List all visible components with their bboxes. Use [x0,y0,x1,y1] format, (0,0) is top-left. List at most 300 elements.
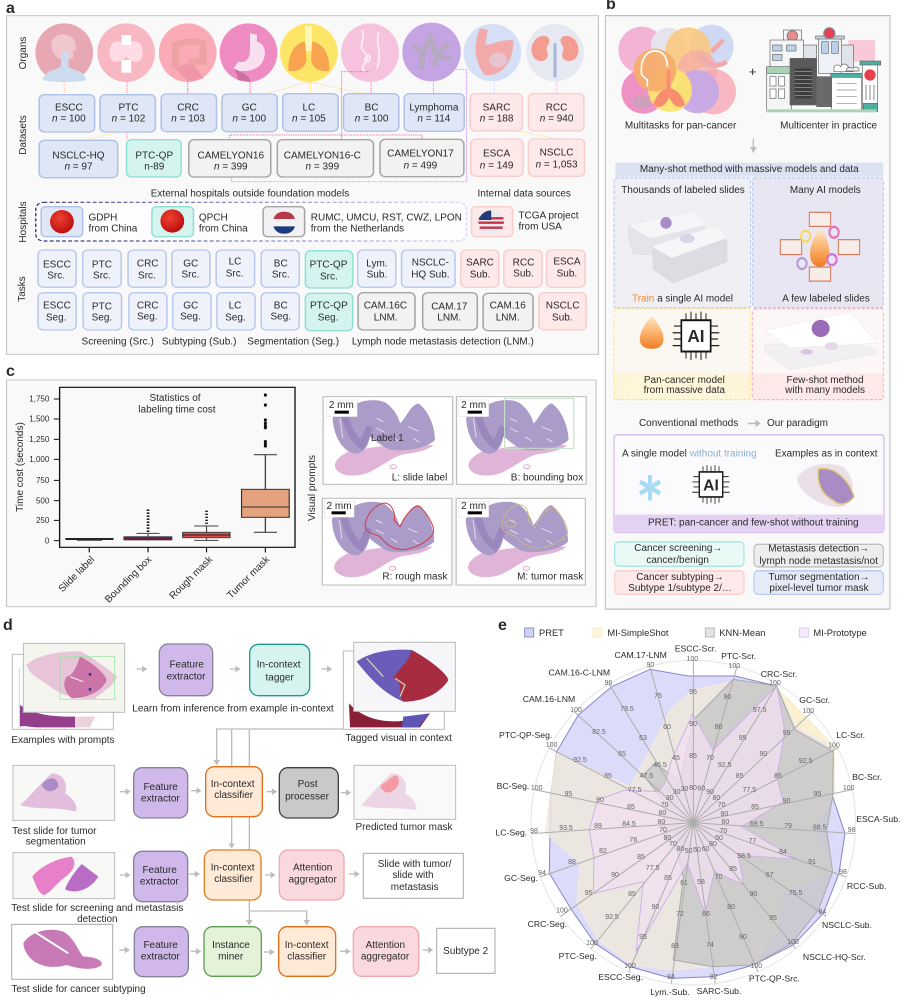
axis tick values: 92.5 [718,762,732,769]
axis tick values: 45 [672,755,680,762]
axis tick values: 90 [646,662,654,669]
task text: LNM. [437,312,461,323]
axis tick values: 82 [599,848,607,855]
axis tick values: 85 [664,875,672,882]
axis tick values: 60 [697,785,705,792]
task text: LNM. [374,312,398,323]
classifier row 2: classifier [214,790,254,801]
classifier row 2 [206,767,262,817]
dataset text: n = 188 [480,113,514,124]
task text: Src. [272,269,290,280]
axis tick values: 79 [784,823,792,830]
predicted mask: Predicted tumor mask [355,822,453,833]
axis tick values: 30 [680,786,688,793]
task text: Src. [320,271,338,282]
arrow [265,873,274,877]
dataset text: n = 97 [64,161,93,172]
axis tick values: 47.5 [640,773,653,780]
axis tick values: 89 [594,823,602,830]
attention aggregator row 3: Attention [293,862,332,873]
sub-panel: few-shot method [753,309,883,400]
instance miner: miner [218,951,244,962]
axis tick values: 58.5 [737,853,751,860]
task legend text: lymph node metastasis/not [759,556,878,567]
axis tick values: 80 [657,819,665,826]
task text: Sub. [367,269,387,280]
classifier row 4: classifier [287,951,327,962]
axis names: BC-Seg. [497,781,529,791]
task legend boxes [615,542,883,594]
axis tick values: 98 [839,869,847,876]
dataset text: n = 105 [292,113,326,124]
box plot chart: 0 [45,536,50,545]
axis tick values: 85 [627,804,635,811]
axis tick values: 82.5 [592,729,606,736]
feature extractor [159,644,213,696]
row labels for panel a: Organs [18,37,29,69]
classifier row 4 [279,927,336,976]
dataset text: n = 940 [540,113,574,124]
task legend text: cancer/benign [646,555,709,566]
axis tick values: 80 [720,811,728,818]
task text: CAM.16C [364,300,407,311]
dataset text: PTC [118,102,138,113]
task legend text: Cancer subtyping→ [636,572,724,583]
dataset text: BC [365,102,378,113]
task text: LC [229,300,241,311]
feature extractor: Feature [169,659,204,670]
box plot chart: 750 [36,476,50,485]
axis names: GC-Seg. [504,873,538,883]
axis tick values: 83 [671,943,679,950]
header bar many-shot: Many-shot method with massive models and data [640,164,859,175]
axis tick values: 90 [689,721,697,728]
instance miner [204,927,261,976]
attention aggregator row 4: aggregator [361,951,410,962]
task boxes [38,250,455,330]
axis tick values: 97.5 [753,707,767,714]
dataset text: n = 100 [52,113,86,124]
legend: KNN-Mean [719,628,765,638]
row labels for panel a: Hospitals [18,201,29,243]
axis tick values: 50 [715,835,723,842]
axis tick values: 100 [687,656,698,663]
feature extractor row 3: extractor [140,876,179,887]
task text: Src. [181,269,199,280]
axis names: LC-Seg. [495,827,527,837]
task legend text [628,543,878,594]
slide: bounding box: B: bounding box [511,473,583,484]
task text: CRC [137,300,159,311]
axis names: ESCA-Sub. [856,814,900,824]
box plot chart [29,387,295,552]
axis tick values: 60 [702,846,710,853]
radar spokes [531,660,855,983]
feature extractor row 2 [134,768,188,818]
axis tick values: 100 [803,708,814,715]
axis tick values: 100 [556,907,568,914]
sub-panel: thousands of labeled slides [614,178,751,308]
axis tick values: 94 [538,870,546,877]
axis names: PTC-Seg. [559,951,597,961]
box plot chart: Statistics of [149,393,201,404]
axis tick values: 91 [808,859,816,866]
example slides with prompts [11,643,125,746]
axis tick values: 90 [706,789,714,796]
axis tick values: 84 [779,849,787,856]
row labels for panel a: Datasets [18,115,29,155]
axis tick values: 75 [654,693,662,700]
arrow [267,790,276,794]
feature extractor row 4 [134,927,188,977]
panel: e radar chart [495,628,900,997]
task text: Src. [226,268,244,279]
task text: ESCC [43,259,71,270]
hospitals row: from China [199,223,248,234]
axis tick values: 95 [739,735,747,742]
axis names: Lym.-Sub. [650,987,690,997]
result box row 3: metastasis [391,882,439,893]
task text: Sub. [470,269,490,280]
axis tick values: 95 [783,730,791,737]
sub-panel: pan-cancer model: Pan-cancer model [644,375,725,386]
axis names: CAM.16-LNM [523,694,575,704]
PRET panel [614,435,884,533]
arrow [341,791,350,795]
axis tick values: 67 [766,872,774,879]
result box row 3 [363,853,463,898]
task abbreviations caption: Lymph node metastasis detection (LNM.) [352,336,534,347]
sub-panel: many AI models [753,178,883,308]
arrow [340,949,349,953]
axis tick values: 77.5 [628,787,642,794]
slide: slide label: 2 mm [329,400,354,411]
panel label d: d [3,617,13,634]
post processer: processer [285,791,330,802]
row: tumor segmentation slide: segmentation [26,836,86,847]
axis tick values: 94 [667,974,675,981]
task text: Seg. [180,311,201,322]
axis tick values: 96 [604,680,612,687]
dataset text: CAMELYON16-C [284,150,361,161]
task text: BC [274,300,288,311]
feature extractor row 4: Feature [143,940,178,951]
slide: rough mask: R: rough mask [382,572,448,583]
axis names: PTC-Scr. [721,651,756,661]
dataset boxes row 1 [39,94,464,178]
sub-panel: few-shot method: Few-shot method [786,375,864,386]
slide: rough mask: 2 mm [327,501,352,512]
instance miner: Instance [212,940,250,951]
dataset text: Lymphoma [409,102,459,113]
panel label c: c [6,363,15,380]
axis names: NSCLC-Sub. [822,920,872,930]
legend: MI-SimpleShot [607,628,669,638]
axis tick values: 100 [624,963,636,970]
axis tick values: 95 [813,791,821,798]
sub-panel: many AI models: A few labeled slides [782,293,870,304]
arrow [137,667,146,671]
axis tick values: 70 [706,755,714,762]
dataset text: ESCA [483,148,511,159]
arrow [120,790,129,794]
task text: CRC [137,258,159,269]
hospitals row: TCGA project [518,210,579,221]
axis tick values: 70 [718,802,726,809]
axis tick values: 92.5 [573,757,587,764]
box plot chart: 250 [36,516,50,525]
attention aggregator row 3 [279,850,344,900]
task text: HQ Sub. [411,269,450,280]
task text: PTC-QP [310,259,348,270]
axis names: CAM.17-LNM [614,650,667,660]
chart axis labels for panel c: Visual prompts [307,455,318,521]
panel: d workflow [11,642,495,995]
axis tick values: 85 [774,773,782,780]
sub-panel: pan-cancer model: AI [687,326,705,346]
arrow [423,948,432,952]
chart axis labels for panel c: Tumor mask [225,554,273,601]
feature extractor row 3 [134,851,188,902]
axis tick values: 100 [570,707,582,714]
example slides with prompts: Examples with prompts [11,735,115,746]
task text: BC [274,258,288,269]
task text: LNM. [496,312,520,323]
axis tick values: 85 [637,854,645,861]
axis tick values: 70 [669,841,677,848]
row labels for panel a: Tasks [17,276,28,302]
axis tick values: 95 [585,890,593,897]
axis names: RCC-Sub. [847,881,886,891]
box plot chart: 1,000 [29,455,50,464]
hospitals row: GDPH [88,212,117,223]
axis names: LC-Scr. [836,730,865,740]
chart axis labels for panel c: Bounding box [103,554,154,605]
dataset text: CRC [177,102,199,113]
feature extractor row 4: extractor [141,951,180,962]
axis tick values: 69.5 [750,821,764,828]
axis tick values: 77 [748,838,756,845]
axis tick values: 90 [759,751,767,758]
dataset text: GC [242,102,257,113]
attention aggregator row 4 [353,927,419,976]
axis tick values: 60 [721,819,729,826]
axis tick values: 80 [663,835,671,842]
attention aggregator row 4: Attention [366,940,405,951]
post processer: Post [298,779,318,790]
dataset text: n = 399 [306,161,340,172]
dotted dataset connectors [64,69,557,182]
arrow [349,872,358,876]
dataset text: n = 1,053 [536,159,578,170]
dataset text: n = 102 [112,113,146,124]
axis tick values: 84.5 [622,821,636,828]
task abbreviations caption: Segmentation (Seg.) [247,336,339,347]
slide: bounding box: 2 mm [461,400,486,411]
task text: NSCLC [546,300,580,311]
dataset text: n = 149 [480,160,514,171]
axis tick values: 79.5 [620,706,634,713]
classifier row 3: classifier [214,874,254,885]
dataset text [52,102,578,172]
task text: Src. [138,270,156,281]
series: KNN-Mean [643,679,833,967]
axis names: CRC-Seg. [528,919,567,929]
task text: ESCC [43,300,71,311]
hospitals row [36,202,579,241]
arrow [264,950,273,954]
attention aggregator row 3: aggregator [289,874,337,885]
row: screening slide [11,853,183,925]
task abbreviations caption: Subtyping (Sub.) [162,336,236,347]
classifier row 3 [204,850,261,900]
box plot chart: 500 [36,496,50,505]
dataset text: n = 399 [214,161,248,172]
icon: organ cluster [618,25,736,114]
arrow [230,667,239,671]
task abbreviations caption: Screening (Src.) [82,336,154,347]
arrow [119,948,129,952]
dataset text: RCC [546,102,567,113]
conventional to paradigm line [639,418,828,429]
axis tick values: 85 [689,753,697,760]
axis names: PTC-QP-Src. [749,974,800,984]
internal sources caption: Internal data sources [478,188,571,199]
task text [43,256,581,323]
axis tick values: 100 [586,940,598,947]
dataset text: CAMELYON16 [198,150,264,161]
axis tick values: 65 [618,751,626,758]
slide: rough mask [322,498,452,585]
in-context tagger: In-context [257,659,301,670]
panel: c labeling cost [7,380,596,607]
row labels for panel a [17,37,29,302]
task legend text: Subtype 1/subtype 2/… [628,583,732,594]
dataset text: n = 499 [404,160,438,171]
axis tick values: 60 [663,724,671,731]
conventional to paradigm line: Our paradigm [767,418,828,429]
row: screening slide: Test slide for screening and metastasis [11,903,183,914]
axis tick values: 50 [693,847,701,854]
axis tick values: 80 [676,846,684,853]
axis names: SARC-Sub. [697,986,741,996]
axis tick values: 88.5 [813,824,827,831]
task text: Seg. [137,311,158,322]
axis names: ESCC-Scr. [675,644,717,654]
axis tick values: 92.5 [605,914,619,921]
slide: bounding box [457,397,586,484]
PRET panel: AI [703,478,719,495]
axis tick values: 90 [596,797,604,804]
task text: GC [183,300,198,311]
axis names [495,644,900,997]
coloured task boxes [305,250,586,331]
hospitals row: from China [88,223,138,234]
caption learn: Learn from inference from example in-context [132,703,334,714]
classifier row 4: In-context [285,940,329,951]
subtype result: Subtype 2 [443,946,489,957]
sub-panel: thousands of labeled slides: Train a single AI model [632,293,733,304]
sub-panel: many AI models: Many AI models [790,185,861,196]
axis tick values: 30 [673,789,681,796]
task legend text: Metastasis detection→ [768,544,869,555]
section captions: External hospitals outside foundation models [151,188,349,199]
legend [525,628,867,638]
PRET panel: A single model without training [622,448,757,459]
row: tumor segmentation slide: Test slide for tumor [12,826,97,837]
axis tick values: 100 [546,742,558,749]
dataset text: SARC [483,102,510,113]
task text: Seg. [92,312,112,323]
axis tick values: 63 [639,735,647,742]
slide: tumor mask: 2 mm [461,501,486,512]
axis tick values: 90 [651,904,659,911]
panel label e: e [498,617,507,634]
task text: PTC [92,301,112,312]
legend: MI-Prototype [813,628,867,638]
organ icons [35,23,584,82]
arrow [322,667,331,671]
axis names: PTC-QP-Seg. [499,730,552,740]
task legend text: Tumor segmentation→ [768,572,870,583]
chart axis labels for panel c [15,422,318,605]
axis tick values: 90 [611,872,619,879]
sub-panel: thousands of labeled slides: Thousands of labeled slides [621,185,745,196]
series: PRET [549,669,845,978]
task text: LC [229,256,241,267]
slide: slide label: L: slide label [392,473,447,484]
axis names: ESCC-Seg. [598,972,643,982]
post processer [279,768,338,818]
sub-panel: pan-cancer model: from massive data [644,385,725,396]
arrow [189,872,199,876]
axis tick values: 98 [530,828,538,835]
axis tick values: 100 [828,742,840,749]
icon: hospitals [766,28,881,112]
hospitals row: from the Netherlands [311,223,404,234]
feature extractor row 2: extractor [141,793,180,804]
panel label a: a [6,0,15,17]
panel: a datasets overview [7,16,598,354]
axis tick values: 72 [676,911,684,918]
axis names: CRC-Scr. [761,669,797,679]
task text: Seg. [318,312,338,323]
axis names: CAM.16-C-LNM [549,668,610,678]
slide: slide label: Label 1 [371,433,404,444]
axis tick values: 85 [604,773,612,780]
task text: RCC [513,257,534,268]
task text: Seg. [225,312,246,323]
slide: tumor mask [456,498,585,585]
axis tick values: 70 [715,874,723,881]
arrow [120,873,129,877]
legend: PRET [539,628,564,638]
task text: CAM.16 [490,300,526,311]
feature extractor: extractor [167,671,206,682]
axis tick values: 75.5 [789,890,803,897]
task text: ESCA [553,256,581,267]
task text: CAM.17 [431,301,468,312]
axis tick values: 90 [723,694,731,701]
task text: Sub. [552,312,573,323]
PRET panel: Examples as in context [775,448,878,459]
row: screening slide: detection [77,914,118,925]
dataset text: n = 100 [232,113,267,124]
dataset text: ESCC [55,102,83,113]
axis tick values: 93.5 [559,825,573,832]
task text: GC [183,258,198,269]
axis tick values: 85 [729,866,737,873]
